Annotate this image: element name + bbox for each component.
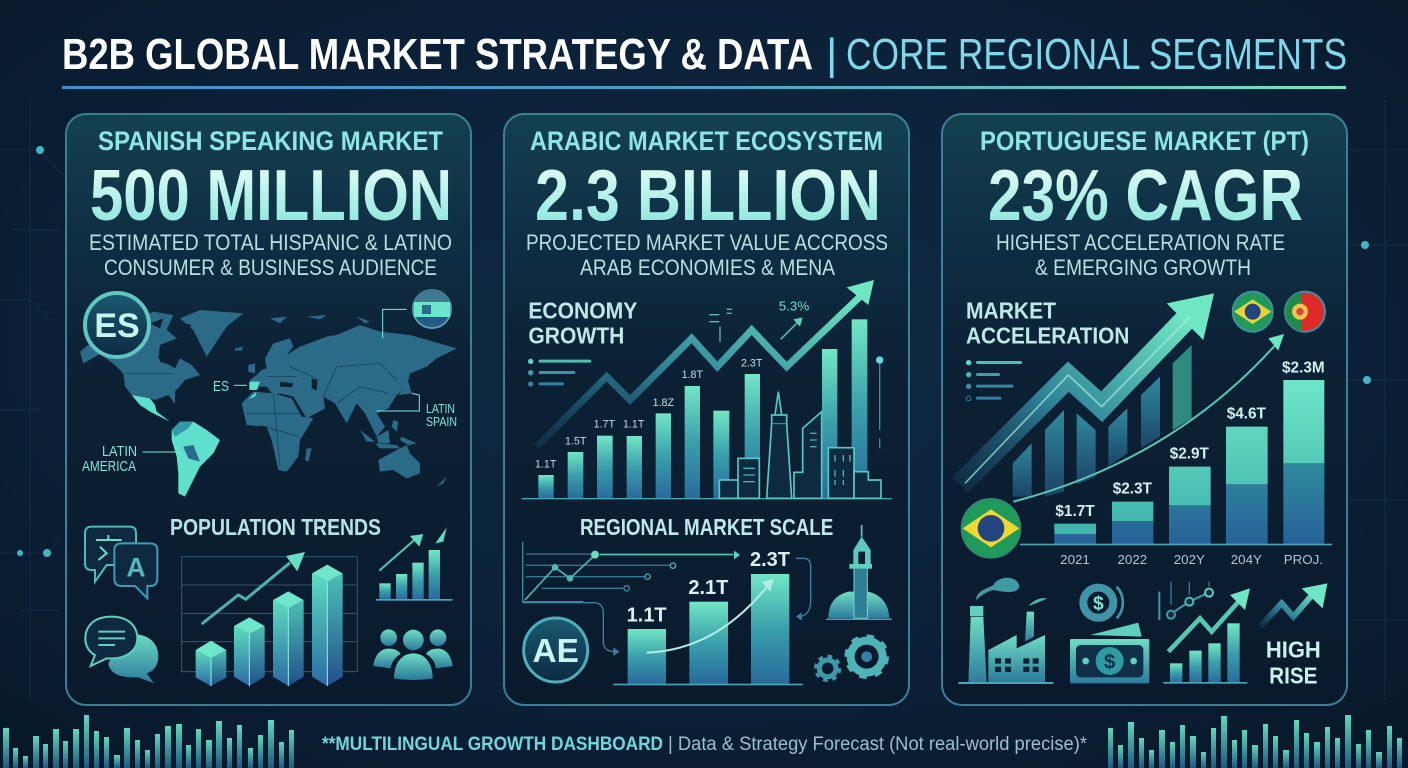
regional bar chart: [613, 549, 811, 685]
bar chart with years: 202Y: [1174, 552, 1205, 567]
economy growth label: ECONOMY: [528, 297, 637, 323]
economy bar chart: 1.1T: [535, 459, 557, 471]
charts in panel: [522, 280, 892, 685]
charts in panel: [958, 292, 1332, 688]
badge: ES: ES: [94, 307, 140, 345]
icon: people group: [373, 629, 453, 680]
panel: spanish speaking market: [66, 114, 471, 705]
subheading: population trends: POPULATION TRENDS: [170, 514, 381, 540]
economy bar chart: [522, 319, 892, 499]
bar chart with years: PROJ.: [1284, 552, 1323, 567]
background bars: [1013, 345, 1192, 497]
market acceleration label: MARKET: [966, 297, 1056, 323]
description: ARAB ECONOMIES & MENA: [580, 255, 835, 280]
icon: translate speech bubbles: [85, 527, 157, 598]
lower icons and chart: [85, 527, 453, 686]
skyline: [719, 392, 881, 498]
5.3 percent callout: [709, 299, 883, 448]
market acceleration label: ACCELERATION: [966, 323, 1129, 349]
map labels: AMERICA: [82, 458, 136, 475]
bar chart with years: [1020, 359, 1332, 567]
description: [89, 230, 452, 280]
economy bar chart: 1.8T: [682, 369, 703, 381]
world map: [80, 309, 457, 497]
panel frame: [942, 114, 1347, 705]
bar chart with years: 204Y: [1231, 552, 1262, 567]
regional bar chart: 2.1T: [688, 577, 728, 599]
economy growth label: GROWTH: [528, 323, 624, 349]
mini line chart: [523, 542, 740, 656]
panel: arabic market ecosystem: [504, 114, 909, 705]
flag: Brazil large: [962, 499, 1020, 558]
big number: 500 MILLION: [90, 156, 452, 236]
map labels: LATIN: [102, 443, 137, 460]
icon: translate speech bubbles: A: [126, 553, 146, 583]
title: B2B GLOBAL MARKET STRATEGY & DATA: [62, 30, 813, 79]
icon: high rise: [1260, 583, 1327, 688]
icon: gears: [816, 637, 887, 680]
legend: [966, 360, 1022, 401]
footer note: [322, 734, 1088, 755]
flag: Spain: [413, 289, 451, 328]
5.3 percent callout: 5.3%: [779, 299, 809, 314]
icon: money: [1070, 587, 1149, 683]
equalizer bars right: [1108, 715, 1402, 768]
icon: high rise: RISE: [1269, 662, 1317, 688]
acceleration arrow: [960, 293, 1214, 485]
equalizer bars left: [3, 715, 294, 768]
regional bar chart: 2.3T: [750, 549, 790, 571]
economy bar chart: 2.3T: [741, 358, 763, 370]
description: [526, 230, 888, 280]
economy bar chart: 1.7T: [594, 419, 615, 431]
icon: chat bubbles: [85, 617, 158, 683]
3d bar chart: [182, 552, 357, 686]
description: & EMERGING GROWTH: [1035, 255, 1251, 280]
market acceleration label: [966, 297, 1129, 349]
map labels: ES: [213, 378, 229, 395]
bar chart with years: 2022: [1118, 552, 1147, 567]
map labels: SPAIN: [426, 414, 457, 429]
badge: AE: [524, 618, 588, 682]
title: [62, 30, 1347, 89]
description: ESTIMATED TOTAL HISPANIC & LATINO: [89, 230, 452, 255]
economy bar chart: 1.8Z: [653, 397, 674, 409]
heading: SPANISH SPEAKING MARKET: [98, 126, 443, 156]
bar chart with years: $2.3T: [1113, 480, 1153, 497]
icon: small bars with arrow: [376, 527, 453, 601]
icon: line and bars: [1159, 582, 1250, 684]
icon: money: $: [1104, 651, 1116, 674]
economy bar chart: 1.1T: [623, 419, 645, 431]
bar chart with years: $4.6T: [1227, 406, 1267, 423]
description: CONSUMER & BUSINESS AUDIENCE: [104, 255, 437, 280]
icon: money: $: [1093, 593, 1104, 614]
badge: AE: AE: [533, 633, 579, 670]
panel frame: [504, 114, 909, 705]
footer note: | Data & Strategy Forecast (Not real-world precise)*: [668, 734, 1088, 755]
bar chart with years: $1.7T: [1055, 503, 1095, 520]
icon: mosque: [826, 525, 892, 620]
badge: ES: [85, 293, 149, 357]
bar chart with years: 2021: [1060, 552, 1090, 567]
description: [996, 230, 1285, 280]
panel frame: [66, 114, 471, 705]
big number: 2.3 BILLION: [535, 156, 881, 236]
icon: factory: [958, 578, 1053, 684]
bar chart with years: $2.9T: [1170, 445, 1210, 462]
map labels: LATIN: [426, 401, 455, 416]
heading: PORTUGUESE MARKET (PT): [980, 126, 1309, 156]
economy growth label: [528, 297, 637, 349]
footer note: **MULTILINGUAL GROWTH DASHBOARD: [322, 734, 663, 755]
growth arrow: [537, 280, 874, 447]
economy bar chart: 1.5T: [565, 435, 587, 447]
heading: ARABIC MARKET ECOSYSTEM: [530, 126, 883, 156]
panel: portuguese market: [942, 114, 1347, 705]
description: HIGHEST ACCELERATION RATE: [996, 230, 1285, 255]
flags: Brazil and Portugal: [1233, 292, 1325, 332]
trend curve: [1013, 334, 1284, 502]
map labels: [82, 378, 457, 475]
regional bar chart: 1.1T: [627, 604, 667, 626]
legend: [528, 359, 591, 387]
title: |: [826, 30, 837, 79]
icon: high rise: HIGH: [1266, 637, 1321, 663]
bar chart with years: $2.3M: [1282, 359, 1325, 376]
subheading: regional market scale: REGIONAL MARKET SCALE: [580, 514, 833, 540]
big number: 23% CAGR: [988, 156, 1303, 236]
description: PROJECTED MARKET VALUE ACCROSS: [526, 230, 888, 255]
